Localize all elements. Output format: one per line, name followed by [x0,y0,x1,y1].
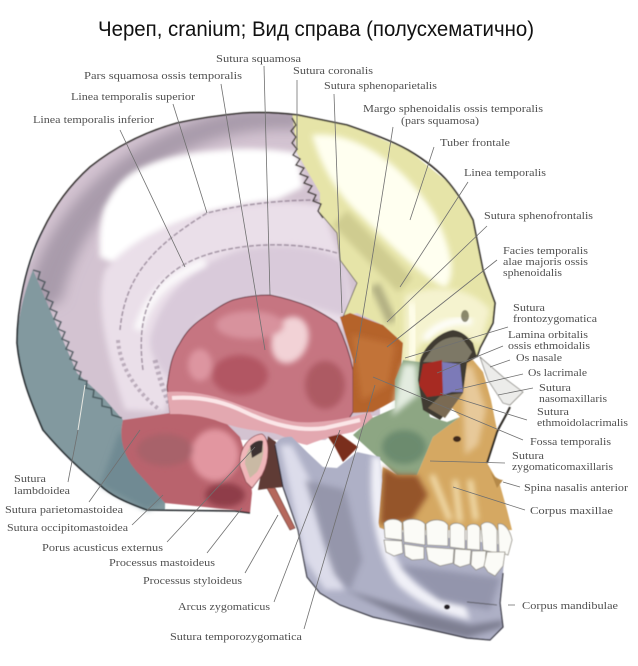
outline [43,113,495,357]
label: Sutura coronalis: Sutura coronalis [293,66,373,77]
label: Os nasale [490,353,562,367]
label: Sutura squamosa: Sutura squamosa [216,54,301,65]
label: Sutura parietomastoidea: Sutura parietomastoidea [5,505,123,516]
mental foramen [444,604,450,610]
label: Processus mastoideus [109,508,242,569]
label: Margo sphenoidalis ossis temporalis [355,104,543,363]
label: Sutura squamosa [216,54,301,295]
label: Sutura zygomaticomaxillaris: zygomaticomaxillaris [512,462,613,473]
label: Sutura temporozygomatica [170,385,375,643]
orbit [418,330,477,420]
maxilla [378,360,512,530]
label: Sutura sphenoparietalis: Sutura sphenoparietalis [324,81,437,92]
label: Sutura lambdoidea: Sutura [14,474,46,485]
lambdoid suture [33,270,122,418]
label: Corpus mandibulae: Corpus mandibulae [522,601,618,612]
nasal spine [487,463,503,488]
label: Margo sphenoidalis ossis temporalis: (pars squamosa) [401,116,480,127]
infratemporal shadow [328,434,358,462]
label: Sutura nasomaxillaris [498,383,607,405]
label: Pars squamosa ossis temporalis: Pars squamosa ossis temporalis [84,71,242,82]
label: Spina nasalis anterior: Spina nasalis anterior [524,483,629,494]
occipital bone [17,270,165,510]
label: Lamina orbitalis ossis ethmoidalis: ossis ethmoidalis [508,341,590,352]
label: Processus mastoideus: Processus mastoideus [109,558,215,569]
label: Linea temporalis [400,168,546,287]
label: Spina nasalis anterior [503,482,629,494]
orbit: blue ethmoid plate [442,362,463,395]
teeth [384,519,512,576]
label: Linea temporalis inferior: Linea temporalis inferior [33,115,155,126]
label: Fossa temporalis: Fossa temporalis [530,437,611,448]
label: Os nasale: Os nasale [516,353,562,364]
label: Processus styloideus [143,515,278,587]
temporal highlights [188,311,345,409]
temporal bone squama [167,295,353,430]
label: Linea temporalis: Linea temporalis [464,168,546,179]
label: Corpus maxillae: Corpus maxillae [530,506,613,517]
styloid process [267,488,295,530]
label: Tuber frontale: Tuber frontale [440,138,510,149]
label: Arcus zygomaticus: Arcus zygomaticus [178,602,270,613]
label: Sutura frontozygomatica: Sutura [513,303,545,314]
label: Sutura nasomaxillaris: nasomaxillaris [539,394,607,405]
nasal bones [480,357,523,405]
label: Facies temporalis alae majoris ossis sphenoidalis: sphenoidalis [503,268,562,279]
label: Arcus zygomaticus [178,430,340,613]
label: Linea temporalis superior: Linea temporalis superior [71,92,196,103]
label: Porus acusticus externus: Porus acusticus externus [42,543,163,554]
label: Corpus maxillae [453,487,613,517]
articular shadow [258,436,283,490]
label: Tuber frontale [410,138,510,220]
label: Pars squamosa ossis temporalis [84,71,265,350]
label: Sutura lambdoidea [14,385,85,497]
orbit: red sphenoid plate [419,360,443,397]
label: Fossa temporalis [373,377,611,448]
label: Sutura sphenoparietalis [324,81,437,313]
label: Sutura zygomaticomaxillaris [430,451,613,473]
frontal bone [292,112,495,365]
label: Lamina orbitalis ossis ethmoidalis: Lamina orbitalis [508,330,588,341]
label: Sutura occipitomastoidea: Sutura occipitomastoidea [7,523,128,534]
label: Sutura ethmoidolacrimalis [440,393,628,429]
label: Sutura sphenofrontalis [387,211,593,322]
label: Sutura nasomaxillaris: Sutura [539,383,571,394]
temporal mastoid part [121,412,252,513]
label: Linea temporalis inferior [33,115,185,267]
label: Sutura sphenofrontalis: Sutura sphenofrontalis [484,211,593,222]
label: Sutura temporozygomatica: Sutura temporozygomatica [170,632,302,643]
mandible [270,430,510,645]
label: Facies temporalis alae majoris ossis sphenoidalis: Facies temporalis [503,246,588,257]
label: Sutura frontozygomatica: frontozygomatica [513,314,597,325]
external acoustic porus [240,434,268,488]
coronal suture [291,118,323,218]
label: Linea temporalis superior [71,92,207,213]
label: Os lacrimale [455,368,587,390]
label: Sutura zygomaticomaxillaris: Sutura [512,451,544,462]
label: Processus styloideus: Processus styloideus [143,576,242,587]
label: Facies temporalis alae majoris ossis sphenoidalis [387,246,588,347]
zygomatic bone [353,360,460,475]
label: Os lacrimale: Os lacrimale [528,368,587,379]
label: Margo sphenoidalis ossis temporalis: Margo sphenoidalis ossis temporalis [363,104,543,115]
title: Череп, cranium; Вид справа (полусхематично) [98,17,534,41]
label: Sutura frontozygomatica [405,303,597,358]
sphenoid greater wing [340,313,403,413]
label: Sutura ethmoidolacrimalis: ethmoidolacrimalis [537,418,628,429]
label: Sutura occipitomastoidea [7,495,163,534]
label: Sutura lambdoidea: lambdoidea [14,486,70,497]
label: Sutura ethmoidolacrimalis: Sutura [537,407,569,418]
zygomatic arch [167,392,374,445]
label: Facies temporalis alae majoris ossis sphenoidalis: alae majoris ossis [503,257,588,268]
label: Lamina orbitalis ossis ethmoidalis [437,330,590,373]
parietal bone [0,100,380,440]
label: Sutura coronalis [293,66,373,150]
label: Porus acusticus externus [42,447,255,554]
skull illustration [0,100,523,645]
label: Sutura parietomastoidea [5,430,140,516]
